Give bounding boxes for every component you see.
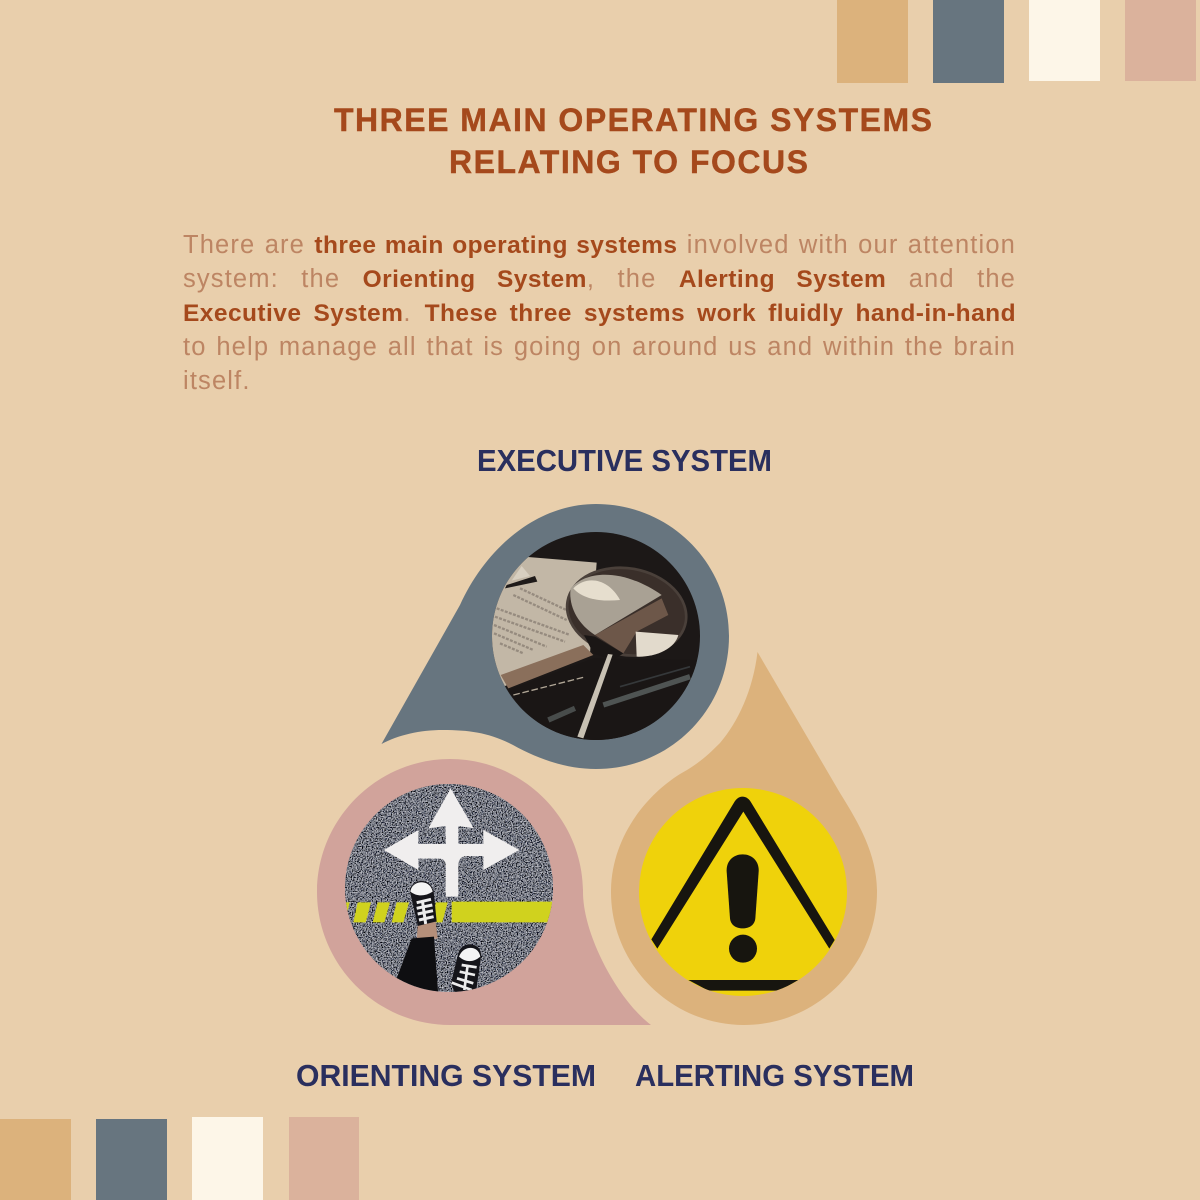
image: yellow warning sign — [635, 785, 851, 1001]
bottom colour swatches — [0, 1117, 359, 1200]
image: magnifying glass on book — [490, 530, 702, 747]
body text block: itself. — [183, 367, 251, 395]
title: THREE MAIN OPERATING SYSTEMS — [334, 102, 932, 138]
body text block: There are three main operating systems involved with our attention — [183, 231, 1016, 259]
title: RELATING TO FOCUS — [449, 144, 808, 180]
body text block: to help manage all that is going on around us and within the brain — [183, 333, 1016, 361]
body text block: system: the Orienting System, the Alerting System and the — [183, 265, 1016, 293]
teardrop: alerting system — [611, 652, 877, 1025]
teardrop: executive system — [382, 504, 729, 769]
label: orienting system: ORIENTING SYSTEM — [296, 1058, 596, 1093]
label: executive system: EXECUTIVE SYSTEM — [477, 443, 772, 478]
body text block: Executive System. These three systems work fluidly hand-in-hand — [183, 299, 1016, 327]
image: road arrows and sneakers — [345, 784, 553, 992]
top colour swatches — [837, 0, 1196, 83]
teardrop: orienting system — [317, 759, 651, 1025]
title — [334, 102, 932, 180]
label: alerting system: ALERTING SYSTEM — [635, 1058, 914, 1093]
body text block — [183, 231, 1016, 395]
